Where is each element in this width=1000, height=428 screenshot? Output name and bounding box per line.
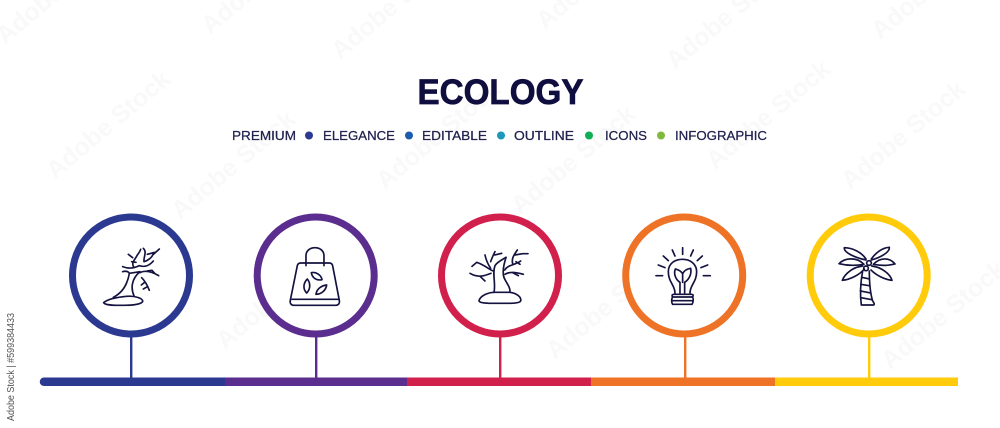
subtitle keyword row: ICONS xyxy=(605,128,647,143)
icon: bare tree xyxy=(470,250,528,303)
text: Adobe Stock xyxy=(166,105,301,225)
text: Adobe Stock xyxy=(541,245,676,365)
text: Adobe Stock xyxy=(836,75,971,195)
step 5: palm tree xyxy=(810,217,927,378)
subtitle keyword row: OUTLINE xyxy=(514,128,574,143)
text: Adobe Stock xyxy=(506,100,641,220)
step 3: bare tree on island xyxy=(442,217,558,378)
subtitle keyword row: EDITABLE xyxy=(422,128,487,143)
text: Adobe Stock xyxy=(701,55,836,175)
timeline bar xyxy=(40,378,958,386)
icon: windswept bare tree xyxy=(104,248,159,305)
subtitle keyword row xyxy=(232,128,767,143)
subtitle keyword row: ELEGANCE xyxy=(323,128,395,143)
icon: light bulb with leaf and rays xyxy=(656,248,710,304)
icon: palm tree xyxy=(839,247,895,305)
stock credit label: Adobe Stock | #599384433 xyxy=(5,313,17,421)
icon: shopping bag with leaves xyxy=(290,248,339,305)
step 2: eco shopping bag xyxy=(257,217,374,378)
step 4: eco light bulb xyxy=(626,217,743,378)
step 1: windswept tree xyxy=(72,217,190,378)
subtitle keyword row: INFOGRAPHIC xyxy=(675,128,767,143)
text: Adobe Stock xyxy=(371,75,506,195)
subtitle keyword row: PREMIUM xyxy=(232,128,296,143)
title: ECOLOGY xyxy=(418,73,584,112)
text: Adobe Stock xyxy=(41,65,176,185)
text: Adobe Stock xyxy=(211,235,346,355)
